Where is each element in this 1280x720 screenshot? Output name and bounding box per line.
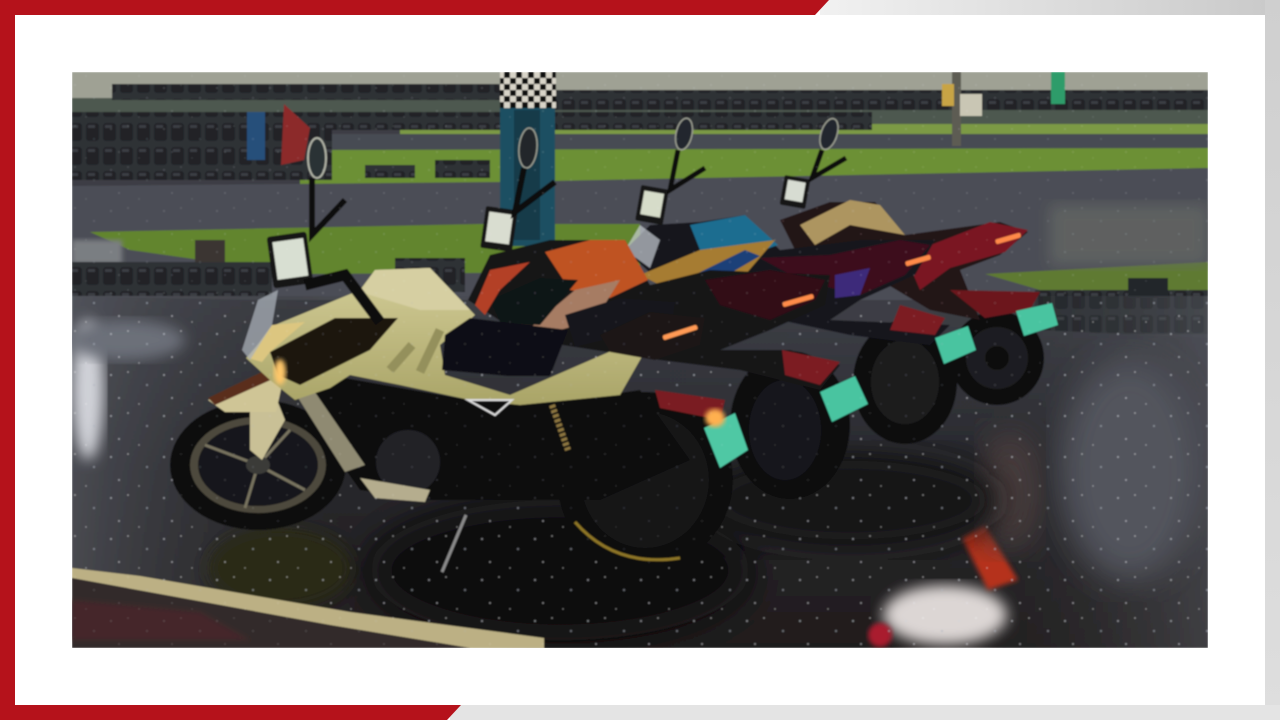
tyre barriers (72, 84, 1208, 334)
mirror and handlebar (308, 138, 326, 178)
tail (609, 326, 696, 360)
kerb line (72, 568, 544, 648)
cream bodywork (246, 268, 660, 405)
rain overlay (72, 72, 1208, 648)
motorcycle 2: orange (468, 127, 868, 499)
triangle badge (468, 400, 512, 415)
dashboard (267, 231, 313, 289)
suspension spring (552, 405, 568, 450)
motorcycle 4: rear, cream and red (780, 116, 1058, 405)
fender (208, 380, 282, 414)
checkered tower (500, 72, 556, 246)
swingarm and rear fender (655, 390, 725, 420)
photo: motorcycles parked on a wet track (65, 72, 1208, 648)
windshield (242, 290, 278, 360)
frame and engine (300, 370, 690, 500)
frame: grey bottom bar (450, 705, 1280, 720)
front wheel (170, 400, 346, 530)
wet ground (65, 296, 1208, 648)
frame: red top bar (0, 0, 829, 15)
headlight (248, 322, 305, 362)
background wall and track (72, 72, 1208, 339)
rear wheel (557, 392, 733, 568)
forks (298, 392, 366, 474)
motorcycle 3: blue and yellow (625, 117, 976, 444)
motorcycle 1: front, cream and black (170, 138, 748, 572)
dark panel (270, 318, 398, 385)
kickstand (442, 515, 466, 572)
licence plate (704, 413, 748, 468)
frame: grey right bar (1265, 0, 1280, 720)
frame: red bottom bar (0, 705, 461, 720)
frame: red left bar (0, 0, 15, 720)
frame: grey top bar (820, 0, 1280, 15)
seat (564, 302, 607, 328)
number decal (390, 330, 440, 372)
signal poles and flags (247, 72, 1065, 165)
